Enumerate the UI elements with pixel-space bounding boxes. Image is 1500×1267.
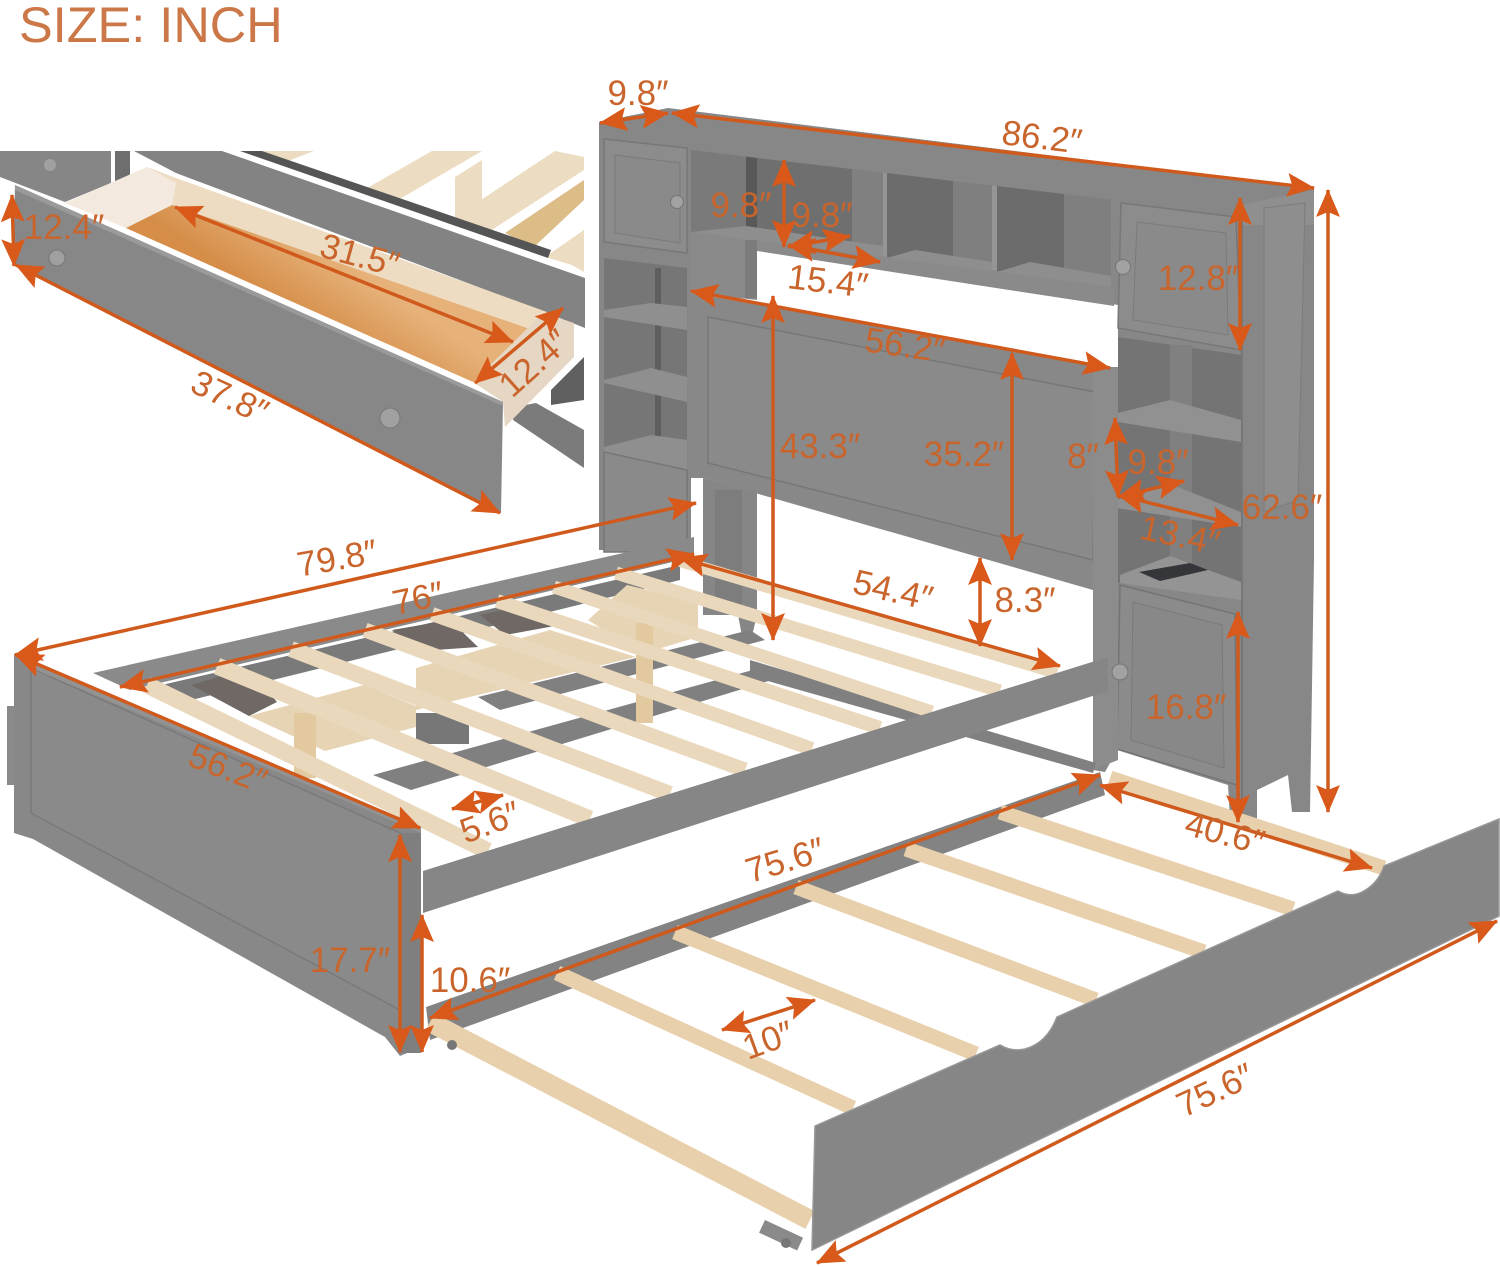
drawer knobs (49, 250, 400, 428)
bed slats (147, 561, 1057, 851)
dimension: 12.8 door: 12.8″ (1158, 259, 1238, 298)
charging panel (1139, 563, 1208, 581)
dimension: 79.8 outer length: 79.8″ (294, 532, 380, 585)
dimension: 8 shelf height (1067, 418, 1118, 497)
left upper cabinet door (604, 139, 687, 253)
far side rail (93, 537, 694, 690)
trundle front panel (812, 819, 1499, 1250)
dimension: 16.8 lower door: 16.8″ (1146, 688, 1226, 727)
dimension: 56.2 footboard: 56.2″ (183, 736, 272, 801)
trundle casters (447, 1040, 803, 1250)
dimension: 75.6 trundle front (817, 921, 1497, 1263)
right upper door (1116, 203, 1241, 350)
dimension: 75.6 trundle front: 75.6″ (1170, 1056, 1260, 1125)
dimension: 10 trundle slat gap (722, 1000, 815, 1068)
inner ledger (140, 565, 680, 704)
dimension: 13.4 shelf width: 13.4″ (1136, 508, 1223, 563)
dimension: 13.4 shelf width (1118, 495, 1238, 563)
right open shelves (1116, 337, 1241, 600)
metal box (416, 713, 469, 744)
left open shelves (604, 258, 687, 470)
drawer long wall (147, 167, 547, 330)
dimension: 54.4 inner width: 54.4″ (849, 562, 937, 619)
bed frame structure under slats (7, 537, 1128, 1056)
right lower door (1117, 585, 1237, 785)
dimension: 12.4 drawer height: 12.4″ (24, 208, 104, 247)
dimension: 9.8 cubby height: 9.8″ (710, 186, 772, 225)
drawer short wall (65, 167, 176, 228)
dimension: 31.5 drawer inner length: 31.5″ (316, 226, 404, 285)
dimension: 31.5 drawer inner length (175, 207, 513, 342)
gap below cubbies (757, 251, 1112, 370)
trundle slats (430, 778, 1384, 1220)
dark gaps (191, 604, 560, 716)
near side rail (423, 657, 1108, 913)
gray rail (134, 151, 585, 328)
dimension: 86.2 width (672, 113, 1314, 188)
dark rail strip (240, 151, 551, 258)
dimension: 56.2 headboard width (691, 291, 1110, 370)
inset slats (254, 151, 584, 272)
dimension: 75.6 trundle rail (430, 775, 1100, 1018)
band below cubbies (691, 232, 1114, 306)
footboard (7, 654, 421, 1056)
dimension: 9.8 shelf depth: 9.8″ (1127, 443, 1189, 482)
dimension: 8.3 under-headboard: 8.3″ (994, 581, 1056, 620)
drawer end wall (473, 313, 574, 427)
drawer floor (126, 205, 533, 382)
dimension: 9.8 cubby depth: 9.8″ (791, 196, 853, 235)
dimension: 8.3 under-headboard (980, 558, 1056, 646)
dimension: 86.2 width: 86.2″ (1000, 113, 1084, 162)
cross beams (373, 630, 1096, 790)
dimension: 9.8 cubby height (710, 160, 784, 247)
dimension: 10.6 trundle clearance (422, 915, 510, 1052)
lower metal bracket (513, 357, 584, 468)
dimension: 5.6 slat gap: 5.6″ (455, 794, 526, 851)
dimension: 54.4 inner width (680, 558, 1060, 666)
inset darker slat (505, 180, 584, 247)
dimension: 10.6 trundle clearance: 10.6″ (430, 961, 510, 1000)
dimension: 17.7 footboard height: 17.7″ (310, 941, 390, 980)
wood center beam (249, 585, 698, 751)
dimension: 12.4 drawer inner width: 12.4″ (491, 322, 577, 405)
dimension: 76 inner length: 76″ (389, 574, 447, 623)
dimension: 8 shelf height: 8″ (1067, 437, 1099, 476)
dimension: 10 trundle slat gap: 10″ (737, 1013, 799, 1068)
right side panel (1241, 190, 1314, 805)
dimension: 15.4 cubby width: 15.4″ (785, 257, 870, 306)
dimension: 40.6 trundle width: 40.6″ (1181, 804, 1269, 863)
dimension: 37.8 drawer front: 37.8″ (185, 363, 275, 432)
headboard legs (703, 478, 757, 636)
dimension: 43.3 headboard clearance: 43.3″ (780, 427, 860, 466)
bookcase silhouette (599, 108, 1314, 819)
dimension: 76 inner length (120, 554, 694, 687)
left post (745, 240, 757, 298)
dimension: 62.6 height: 62.6″ (1242, 488, 1322, 527)
dimension: 9.8 depth top: 9.8″ (607, 74, 669, 113)
trundle rail (426, 772, 1105, 1040)
trundle (426, 772, 1499, 1250)
door knob over rail (1112, 664, 1128, 680)
dimension: 37.8 drawer front (16, 265, 500, 513)
drawer front top edge (15, 185, 503, 406)
dimension: 75.6 trundle rail: 75.6″ (741, 830, 829, 891)
dimension: 56.2 footboard (16, 655, 420, 828)
headboard bookcase (599, 108, 1314, 819)
inset: drawer detail (0, 151, 585, 513)
dimension: 9.8 shelf depth (1118, 443, 1189, 497)
left lower cabinet door (604, 452, 687, 552)
dimension: 56.2 headboard width: 56.2″ (862, 321, 948, 370)
dimension: 79.8 outer length (15, 503, 696, 655)
top cubbies (691, 150, 1111, 287)
dimension: 12.4 drawer height (12, 195, 104, 266)
center headboard panel (691, 293, 1118, 770)
drawer front (13, 185, 503, 513)
dimension: 40.6 trundle width (1100, 785, 1372, 868)
upper cabinet corner (0, 151, 130, 202)
dimension: 35.2 panel height: 35.2″ (924, 435, 1004, 474)
wood posts (294, 623, 653, 778)
